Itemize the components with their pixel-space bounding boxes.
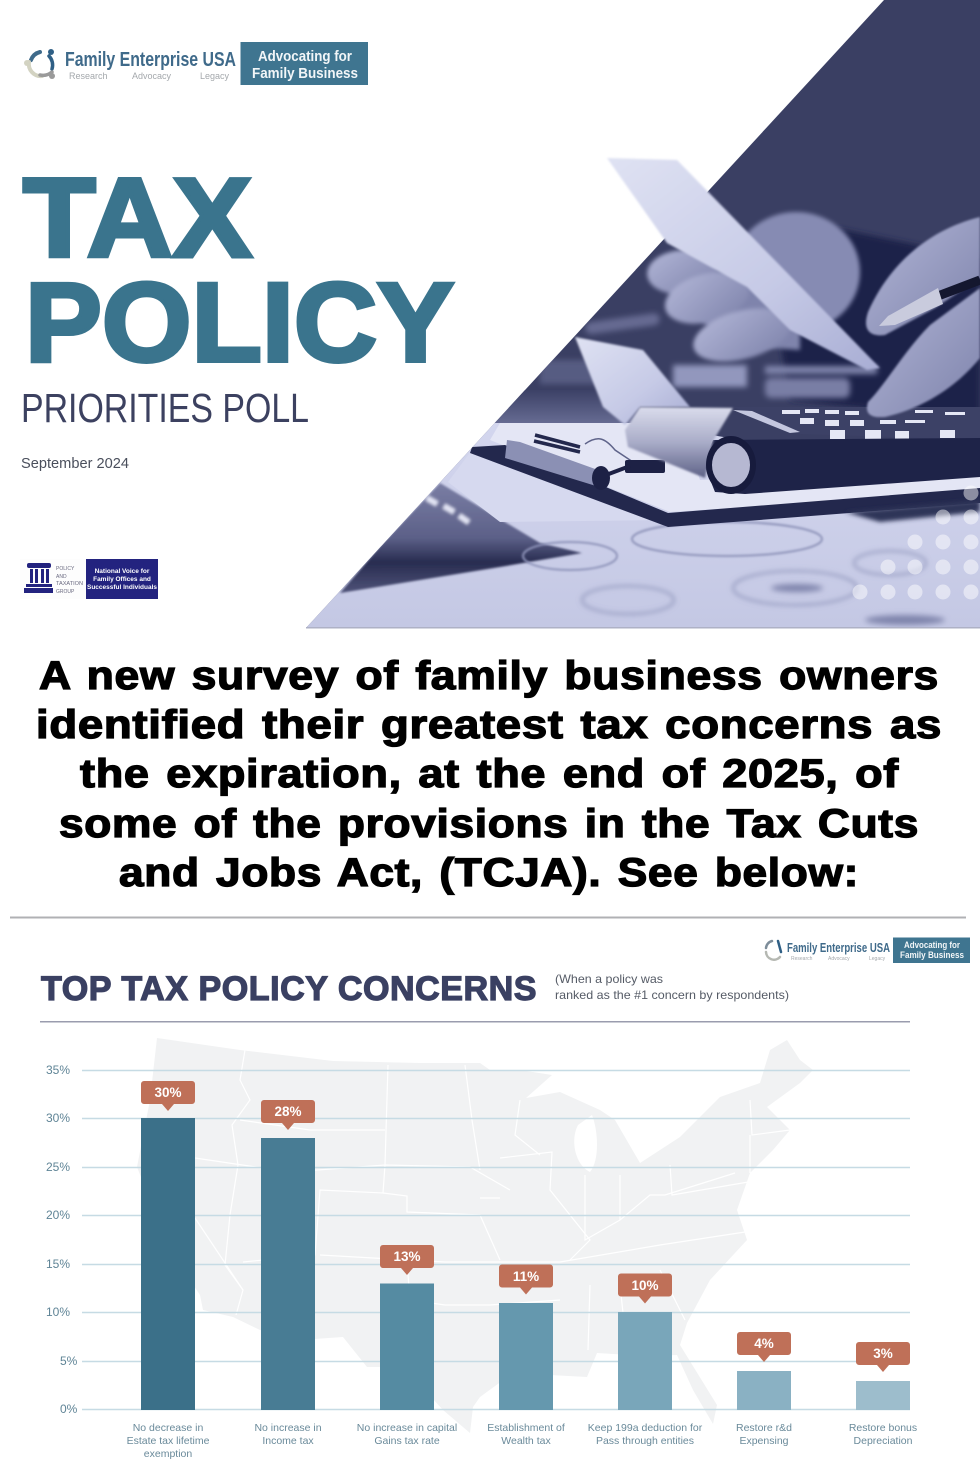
title xyxy=(23,156,454,385)
y axis labels: 10% xyxy=(46,1305,70,1319)
chart note xyxy=(555,972,789,1002)
left hand xyxy=(645,212,860,371)
clipboard sheet xyxy=(463,493,648,522)
clip xyxy=(505,435,665,490)
y axis labels: 30% xyxy=(46,1111,70,1125)
subtitle: PRIORITIES POLL xyxy=(21,385,309,431)
logo tagline xyxy=(69,71,230,81)
group name: POLICY xyxy=(56,566,75,572)
title: TAX xyxy=(23,156,252,280)
category labels: Wealth tax xyxy=(501,1435,551,1447)
small logo tagline: Advocacy xyxy=(828,956,850,962)
dots pattern xyxy=(852,486,978,600)
blurred form circles xyxy=(523,522,926,614)
category labels: Gains tax rate xyxy=(374,1435,440,1447)
category labels: No increase in xyxy=(254,1422,322,1434)
navy badge: Successful Individuals xyxy=(87,584,157,591)
group name xyxy=(56,566,83,595)
bar: r&d expensing 4% xyxy=(737,1332,791,1410)
headline text block xyxy=(36,654,942,895)
chart note: ranked as the #1 concern by respondents) xyxy=(555,988,789,1002)
category labels: Depreciation xyxy=(854,1435,913,1447)
small logo tagline xyxy=(791,956,886,962)
state borders xyxy=(195,1050,790,1350)
calculator xyxy=(625,407,980,494)
y axis labels: 35% xyxy=(46,1063,70,1077)
blurred keys behind xyxy=(540,312,877,398)
receipt lower xyxy=(575,337,690,425)
logo badge xyxy=(240,42,368,85)
logo: Family Enterprise USA small xyxy=(766,938,970,963)
icon: family enterprise circle of figures xyxy=(24,49,55,79)
category labels: Keep 199a deduction for xyxy=(588,1422,703,1434)
category labels: Establishment of xyxy=(487,1422,565,1434)
title: POLICY xyxy=(25,260,454,385)
icon: circle of figures small xyxy=(766,941,781,960)
clipboard edge xyxy=(470,445,980,527)
paper sheet on desk xyxy=(306,423,980,628)
desk band xyxy=(480,390,640,423)
small logo tagline: Research xyxy=(791,956,813,962)
logo tagline: Research xyxy=(69,71,108,81)
photo: hands using a calculator with receipts xyxy=(300,0,980,628)
bar: estate tax 30% xyxy=(141,1081,195,1410)
headline text block: some of the provisions in the Tax Cuts xyxy=(59,802,919,846)
logo: Policy and Taxation Group xyxy=(20,559,158,599)
small logo name: Family Enterprise USA xyxy=(787,940,890,955)
bar: capital gains 13% xyxy=(380,1245,434,1410)
category labels: Estate tax lifetime xyxy=(127,1435,210,1447)
chart heading: TOP TAX POLICY CONCERNS xyxy=(41,970,537,1008)
bar: estate tax 30%: 30% xyxy=(154,1085,182,1100)
sleeve shadow xyxy=(780,228,980,420)
bar: wealth tax 11% xyxy=(499,1264,553,1410)
headline text block: the expiration, at the end of 2025, of xyxy=(80,752,899,796)
date: September 2024 xyxy=(21,456,129,472)
category labels: Expensing xyxy=(739,1435,789,1447)
bar: 199a deduction 10% xyxy=(618,1274,672,1410)
bar: r&d expensing 4%: 4% xyxy=(754,1336,774,1351)
headline text block: and Jobs Act, (TCJA). See below: xyxy=(119,851,859,895)
bar: income tax 28%: 28% xyxy=(274,1104,302,1119)
category labels xyxy=(127,1422,917,1460)
great lakes xyxy=(574,1115,597,1172)
navy badge xyxy=(86,559,158,599)
map: United States background xyxy=(137,1038,813,1433)
keys xyxy=(782,409,965,439)
category labels: Income tax xyxy=(262,1435,314,1447)
headline text block: A new survey of family business owners xyxy=(39,654,939,698)
bar: income tax 28% xyxy=(261,1100,315,1410)
small logo badge: Advocating for xyxy=(904,940,960,950)
small logo badge: Family Business xyxy=(900,950,964,960)
right hand and pen xyxy=(866,217,980,417)
bar: bonus depreciation 3%: 3% xyxy=(873,1346,893,1361)
y axis labels: 0% xyxy=(60,1402,78,1416)
bar: wealth tax 11%: 11% xyxy=(513,1269,539,1284)
bar: 199a deduction 10%: 10% xyxy=(631,1278,659,1293)
logo tagline: Advocacy xyxy=(132,71,172,81)
y axis labels: 20% xyxy=(46,1208,70,1222)
logo: Family Enterprise USA xyxy=(24,42,368,85)
headline text block: identified their greatest tax concerns as xyxy=(36,703,942,747)
category labels: No increase in capital xyxy=(357,1422,457,1434)
y axis labels: 25% xyxy=(46,1160,70,1174)
y axis labels xyxy=(46,1063,78,1416)
group name: AND xyxy=(56,574,67,580)
logo badge: Family Business xyxy=(252,65,358,82)
y axis labels: 5% xyxy=(60,1354,78,1368)
group name: TAXATION xyxy=(56,581,83,587)
small logo tagline: Legacy xyxy=(869,956,886,962)
y axis labels: 15% xyxy=(46,1257,70,1271)
group name: GROUP xyxy=(56,589,75,595)
icon: column capital xyxy=(24,563,53,593)
navy badge: National Voice for xyxy=(95,568,150,575)
logo badge: Advocating for xyxy=(258,48,352,65)
category labels: Pass through entities xyxy=(596,1435,694,1447)
bar chart xyxy=(46,1063,917,1460)
category labels: Restore r&d xyxy=(736,1422,792,1434)
small logo badge xyxy=(893,938,970,963)
blurred laptop keyboard at lower left xyxy=(340,483,582,593)
category labels: exemption xyxy=(144,1448,192,1460)
grid lines xyxy=(82,1070,910,1410)
logo tagline: Legacy xyxy=(200,71,230,81)
bar: capital gains 13%: 13% xyxy=(393,1249,421,1264)
category labels: No decrease in xyxy=(133,1422,203,1434)
navy badge: Family Offices and xyxy=(93,576,151,583)
logo name: Family Enterprise USA xyxy=(65,49,236,71)
category labels: Restore bonus xyxy=(849,1422,917,1434)
bar: bonus depreciation 3% xyxy=(856,1342,910,1410)
receipt upper, overlapping the diagonal xyxy=(607,158,880,370)
chart note: (When a policy was xyxy=(555,972,663,986)
